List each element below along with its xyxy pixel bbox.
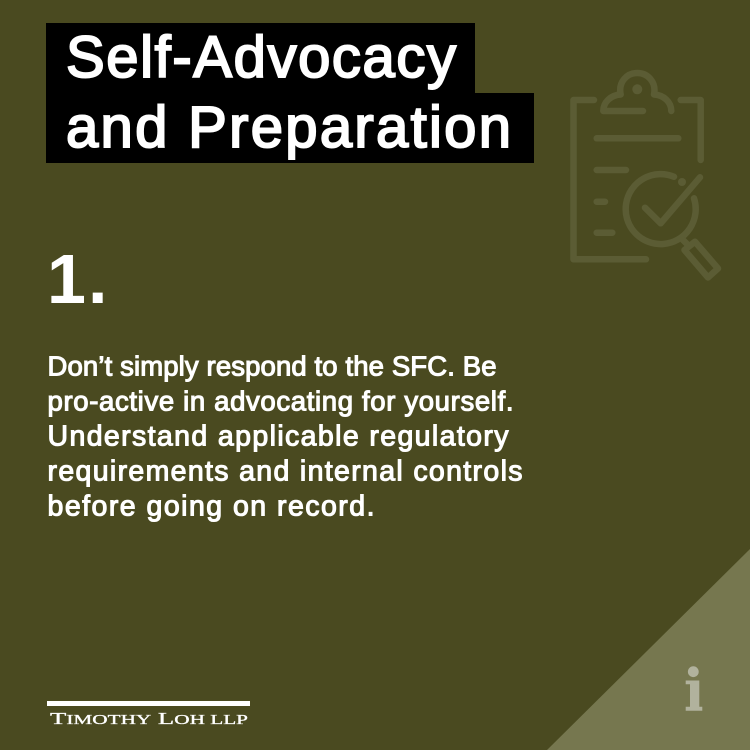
title (46, 23, 534, 163)
title: and Preparation (66, 95, 511, 160)
footer logo (47, 701, 250, 728)
body text (48, 350, 522, 522)
body text: before going on record. (48, 490, 374, 522)
footer logo: T IMOTHY L OH LLP (50, 709, 248, 728)
step number: . (88, 240, 107, 318)
body text: Understand applicable regulatory (48, 420, 509, 452)
icon: info letter i (686, 666, 702, 711)
body text: pro-active in advocating for yourself. (48, 386, 514, 416)
title: Self-Advocacy (66, 25, 456, 90)
body text: Don’t simply respond to the SFC. Be (48, 350, 496, 382)
corner triangle (547, 549, 750, 750)
icon: clipboard with magnifier (574, 73, 718, 278)
step number: 1 (47, 240, 86, 318)
body text: requirements and internal controls (48, 456, 522, 488)
